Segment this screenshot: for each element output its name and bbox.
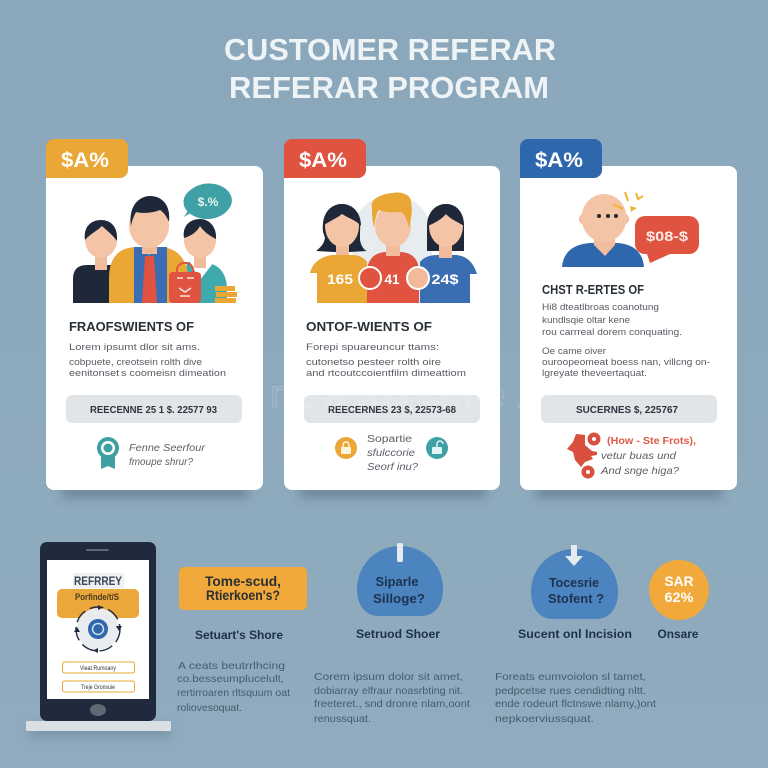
step 2: text: Corem ipsum dolor sit amet, [314, 671, 463, 683]
callout: card 1 [129, 443, 206, 468]
text block: card 1: cobpuete, creotsein rolth dive [69, 357, 202, 368]
illustration: three people with amounts: 165 [327, 271, 353, 287]
stat label: Onsare [658, 627, 699, 641]
speech bubble: $08-$ [646, 228, 688, 244]
stat bar: card 2 [304, 395, 480, 423]
step 3: text: pedpcetse rues cendidting nltt. [495, 685, 646, 697]
step 1: orange box [179, 567, 307, 610]
text block: card 2: and rtcoutccoientfilm dimeattiom [306, 368, 466, 379]
step 2: blue dome [357, 543, 443, 616]
tag: card 3: $A% [535, 149, 583, 172]
callout: card 1: fmoupe shrur? [129, 457, 193, 468]
text block: card 1: eenitonset s coomeisn dimeation [69, 368, 226, 379]
speech bubble [184, 183, 232, 219]
step 2: label: Setruod Shoer [356, 627, 440, 641]
text block: card 3: rou carrreal dorem conquating. [542, 327, 682, 338]
phone illustration [26, 542, 171, 737]
callout: card 3: vetur buas und [601, 451, 676, 462]
text block: card 3: kundlsqie oltar kene [542, 315, 630, 326]
step 3: text: nepkoerviussquat. [495, 713, 594, 725]
step 3: label: Sucent onl Incision [518, 627, 632, 641]
illustration: three people with amounts: 41 [384, 271, 400, 287]
stat bar: card 3 [541, 395, 717, 423]
callout: card 3: (How - Ste Frots), [607, 436, 696, 447]
illustration: three people with amounts [310, 192, 477, 303]
stat circle: SAR [664, 573, 694, 589]
panel: card 1 [46, 139, 263, 498]
tag: card 1 [46, 139, 128, 178]
stat circle: 62% [664, 589, 694, 605]
title [224, 32, 556, 105]
step 3: blue dome [531, 545, 618, 619]
step 1: orange box: Rtierkoen's? [206, 587, 280, 603]
tag: card 3 [520, 139, 602, 178]
step 1: text: A ceats beutrrlhcing [178, 660, 285, 672]
stat circle [649, 560, 709, 620]
step 2: blue dome: Siparle [376, 574, 418, 589]
step 3: text [495, 671, 656, 725]
step 2: blue dome: Silloge? [373, 591, 425, 606]
step 2: text: dobiarray elfraur noasrbting nit. [314, 685, 463, 697]
tag: card 1: $A% [61, 149, 109, 172]
step 1: orange box: Tome-scud, [205, 573, 281, 589]
heading: card 3: CHST R-ERTES OF [542, 283, 644, 297]
heading: card 1: FRAOFSWIENTS OF [69, 320, 194, 334]
icon: rosette badge [97, 437, 119, 469]
text block: card 1: Lorem ipsumt dlor sit ams. [69, 342, 200, 353]
text block: card 3 [542, 302, 710, 379]
callout: card 3: And snge higa? [600, 466, 679, 477]
panel: card 3 [520, 139, 737, 498]
text block: card 2: cutonetso pesteer rolth oire [306, 357, 441, 368]
phone illustration: Treje Gronsuie [81, 684, 115, 691]
text block: card 3: ouroopeomeat boess nan, villcng on- [542, 357, 710, 368]
callout: card 1: Fenne Seerfour [129, 443, 206, 454]
step 2: text: freeteret., snd dronre nlam,oont [314, 698, 470, 710]
heading: card 2: ONTOF-WIENTS OF [306, 320, 432, 334]
speech bubble: $.% [198, 195, 219, 209]
step 3: blue dome: Tocesrie [549, 575, 599, 590]
phone illustration: REFRREY [74, 576, 122, 588]
stat bar: card 2: REECERNES 23 $, 22573-68 [328, 405, 456, 416]
phone illustration: Vieat Rumoany [80, 665, 117, 672]
step 3: blue dome: Stofent ? [548, 591, 604, 606]
tag: card 2: $A% [299, 149, 347, 172]
callout: card 2: Seorf inu? [367, 462, 418, 473]
icon: orange lock [335, 437, 357, 459]
title: REFERAR PROGRAM [229, 70, 549, 105]
stat bar: card 1 [66, 395, 242, 423]
step 1: text: roliovesoquat. [177, 702, 242, 714]
step 2: text: renussquat. [314, 713, 371, 725]
icon: red megaphone face [567, 432, 600, 478]
step 1: label: Setuart's Shore [195, 628, 283, 642]
illustration: thinking person with speech bubble [562, 192, 699, 267]
text block: card 3: Oe came oiver [542, 346, 606, 357]
text block: card 1 [69, 342, 226, 379]
step 1: text: co.besseumplucelult, [177, 673, 284, 685]
tag: card 2 [284, 139, 366, 178]
watermark: dreamtime. [238, 371, 526, 417]
stat bar: card 1: REECENNE 25 1 $. 22577 93 [90, 405, 217, 416]
phone illustration: Porfinde/t/S [75, 592, 119, 602]
title: CUSTOMER REFERAR [224, 32, 556, 67]
callout: card 2: sfulccorie [367, 448, 415, 459]
text block: card 2 [306, 342, 466, 379]
callout: card 3 [600, 436, 696, 477]
callout: card 2: Sopartie [367, 434, 413, 445]
text block: card 3: lgreyate theveertaquat. [542, 368, 647, 379]
illustration: three people with amounts: 24$ [432, 271, 459, 287]
step 3: text: Foreats eumvoiolon sl tamet, [495, 671, 646, 683]
illustration: three people with bag and coins [73, 183, 237, 303]
step 1: text: rertirroaren rltsquum oat [177, 687, 290, 699]
text block: card 3: Hi8 dteatlbroas coanotung [542, 302, 659, 313]
step 1: text [177, 660, 290, 714]
icon: teal lock [426, 437, 448, 459]
step 2: text [314, 671, 470, 725]
text block: card 2: Forepi spuareuncur ttams: [306, 342, 439, 353]
callout: card 2 [367, 434, 418, 473]
stat bar: card 3: SUCERNES $, 225767 [576, 405, 678, 416]
panel: card 2 [284, 139, 500, 498]
step 3: text: ende rodeurt flctnswe nlamy,)ont [495, 698, 656, 710]
